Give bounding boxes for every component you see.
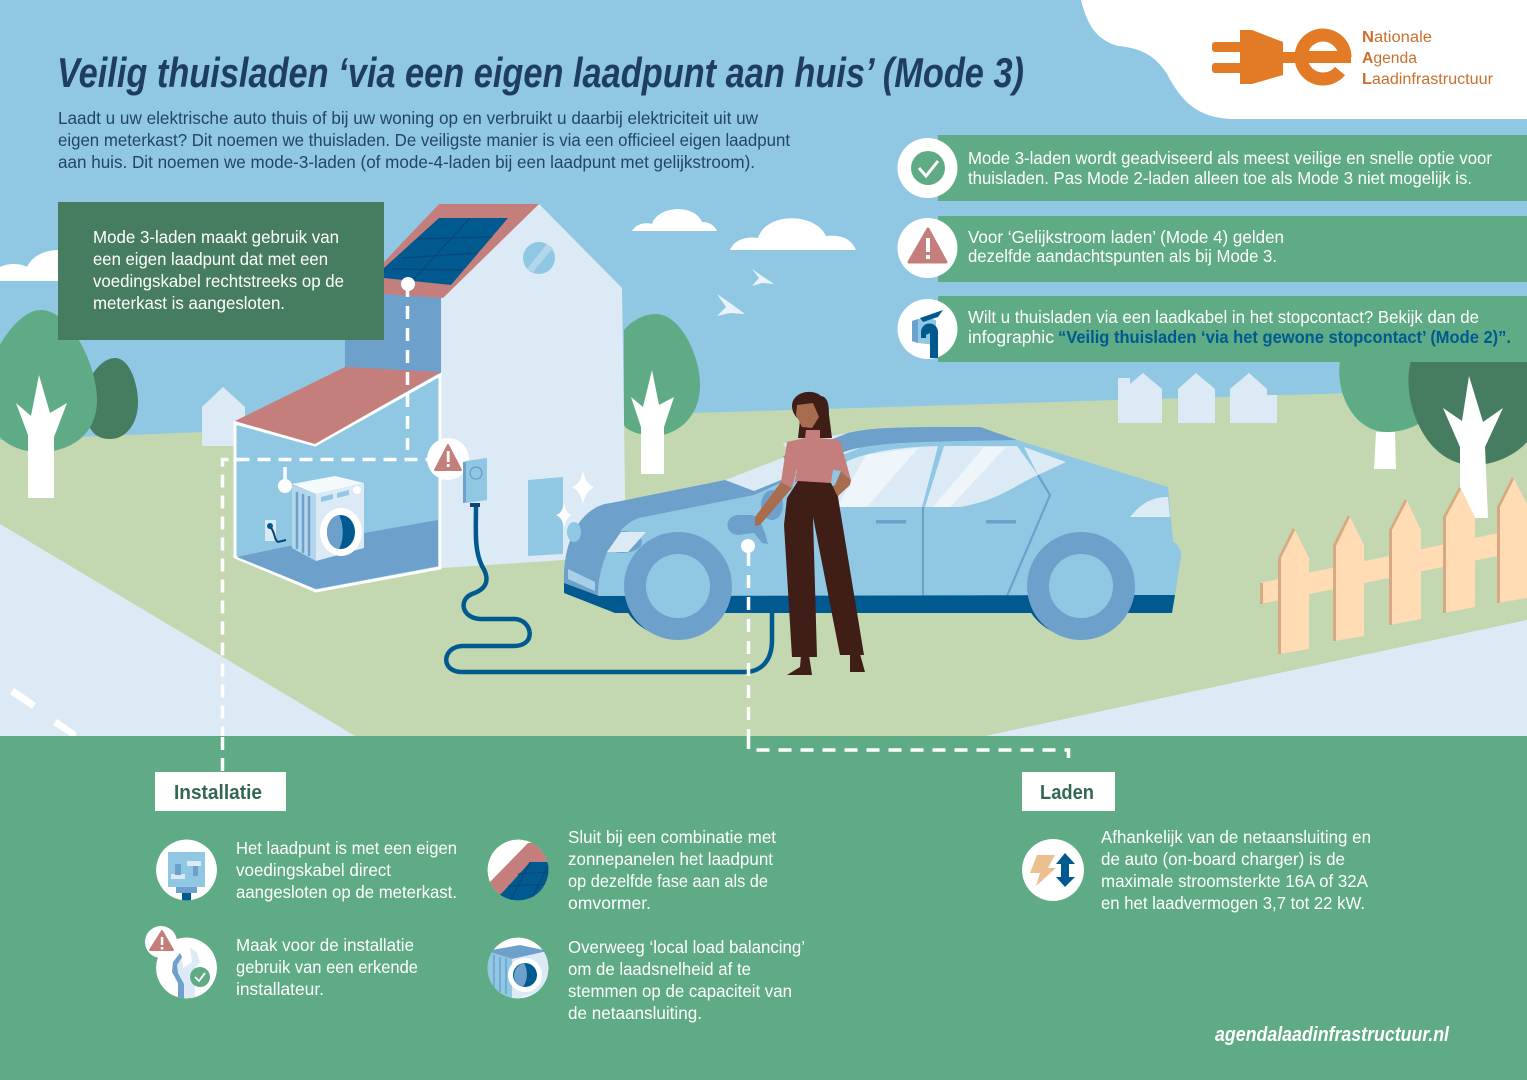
charger box [463,458,487,507]
intro text: aan huis. Dit noemen we mode-3-laden (of mode-4-laden bij een laadpunt met gelijkstroom). [58,152,755,172]
door [528,477,563,556]
callout mode 3 [58,202,384,340]
cloud middle [632,209,717,231]
socket and cable [265,520,286,542]
intro text [58,108,790,172]
logo text: Nationale [1362,29,1432,46]
annexe room [235,375,440,591]
item: laden [1022,827,1371,913]
grass [0,388,1527,736]
tree left dark [85,358,138,439]
front wheel [624,532,732,640]
left arm [755,482,792,526]
item: zonnepanelen: zonnepanelen het laadpunt [568,849,773,869]
item: load balancing [486,937,805,1023]
icon: wrench [145,926,217,998]
callout mode 3: voedingskabel rechtstreeks op de [93,271,344,291]
car body [598,440,1181,596]
item: load balancing: Overweeg ‘local load balancing’ [568,937,805,957]
advice banner 3: Wilt u thuisladen via een laadkabel in het stopcontact? Bekijk dan de [968,307,1479,327]
label: Laden: Laden [1040,782,1094,804]
dashed route solar to warning [401,277,415,450]
charging cable [446,505,772,672]
icon: warning [909,229,946,262]
door lines [923,475,1050,596]
blue side wall [345,292,441,374]
dashed route laden [741,539,1068,758]
label: Laden [1022,772,1115,811]
dashed route installation [222,460,438,772]
windscreen [725,433,872,491]
logo [1212,29,1493,88]
item: load balancing: om de laadsnelheid af te [568,959,751,979]
advice banner 3 [898,296,1527,362]
item: laden: Afhankelijk van de netaansluiting en [1101,827,1371,847]
annexe cutaway [235,367,441,591]
footer green panel [0,736,1527,1080]
pickets [1279,477,1527,654]
dashed routes in footer [222,736,1068,772]
logo plug icon [1212,30,1351,84]
icon: check [911,151,945,185]
headlight [567,522,595,591]
annexe floor [237,520,438,589]
annexe roof [235,367,441,444]
item: zonnepanelen [488,830,776,909]
item: installateur: Maak voor de installatie [236,935,414,955]
label: Installatie [155,772,286,811]
tree right trunk [1374,432,1396,469]
advice banner 2: Voor ‘Gelijkstroom laden’ (Mode 4) gelden [968,227,1284,247]
advice banner 1 [898,135,1527,201]
icon: solar roof [488,840,548,900]
item: laadpunt: Het laadpunt is met een eigen [236,838,457,858]
roof [384,204,539,298]
item: installateur: installateur. [236,979,324,999]
car lower shadow [628,613,1053,632]
tree right green [1339,360,1440,432]
item: zonnepanelen: Sluit bij een combinatie met [568,827,776,847]
tree right dark [1408,360,1527,465]
intro text: eigen meterkast? Dit noemen we thuisladen. De veiligste manier is via een officieel eigen laadpunt [58,130,790,150]
solar panel [384,218,508,285]
rear wheel [1027,532,1135,640]
logo text: Laadinfrastructuur [1362,71,1493,88]
car upper dark shell [564,427,1020,600]
fence rail [1260,527,1527,604]
road right [985,620,1527,736]
logo text: Agenda [1362,50,1417,67]
advice banner 1: Mode 3-laden wordt geadviseerd als meest veilige en snelle optie voor [968,148,1492,168]
tree right white trunk [1443,376,1503,518]
title: Veilig thuisladen ‘via een eigen laadpunt aan huis’ (Mode 3) [57,49,1024,96]
rear side window [1024,447,1066,475]
callout mode 3: Mode 3-laden maakt gebruik van [93,227,339,247]
item: zonnepanelen: op dezelfde fase aan als de [568,871,768,891]
label: Installatie: Installatie [174,782,262,804]
small house left [202,387,245,446]
item: laden: de auto (on-board charger) is de [1101,849,1345,869]
woman [755,392,865,675]
item: load balancing: stemmen op de capaciteit van [568,981,792,1001]
fence [1260,477,1527,654]
website url: agendalaadinfrastructuur.nl [1215,1024,1449,1046]
advice banner 2 [898,216,1527,282]
item: laadpunt: aangesloten op de meterkast. [236,882,457,902]
item: laden: maximale stroomsterkte 16A of 32A [1101,871,1368,891]
front window [836,446,938,507]
item: load balancing: de netaansluiting. [568,1003,702,1023]
face [796,403,819,428]
icon: lightning and arrows [1022,839,1084,901]
item: laadpunt [156,838,457,902]
road left [0,524,355,736]
logo text [1362,29,1493,88]
charge port [728,515,768,544]
birds [717,269,774,316]
trousers [784,481,864,657]
advice banner 1: thuisladen. Pas Mode 2-laden alleen toe als Mode 3 niet mogelijk is. [968,168,1472,188]
road markings [10,688,76,736]
intro text: Laadt u uw elektrische auto thuis of bij uw woning op en verbruikt u daarbij elektriciteit uit uw [58,108,758,128]
windscreen frame [783,427,1017,470]
item: laden: en het laadvermogen 3,7 tot 22 kW. [1101,893,1365,913]
tree left trunk [16,375,67,498]
icon: washing machine [486,938,548,1000]
item: installateur: gebruik van een erkende [236,957,418,977]
sill [564,583,1175,613]
logo background blob [1081,0,1527,119]
front side light [602,531,646,553]
item: installateur [145,926,418,999]
house main [345,204,626,568]
sparkles [556,470,594,528]
icon: socket charger [912,310,943,358]
washing machine [292,476,364,561]
door handles [876,520,1016,524]
round window [523,242,555,274]
rear window [925,446,1038,507]
advice banner 2: dezelfde aandachtspunten als bij Mode 3. [968,246,1277,266]
right arm [824,471,851,497]
warning marker [427,438,469,480]
tail light [1130,497,1170,517]
junction dot [278,467,292,493]
house wall [441,204,626,568]
tree left green [0,310,97,452]
feet [787,654,865,675]
hair [792,392,832,438]
advice banner 3: infographic [968,327,1054,347]
item: zonnepanelen: omvormer. [568,893,651,913]
door shadow near woman [761,490,783,520]
car [564,427,1181,640]
callout mode 3: een eigen laadpunt dat met een [93,249,328,269]
icon: charger [156,840,217,901]
advice banner 3: “Veilig thuisladen ‘via het gewone stopcontact’ (Mode 2)”. [1058,327,1511,347]
small houses right [1118,373,1277,423]
sweater [781,430,851,488]
callout mode 3: meterkast is aangesloten. [93,293,285,313]
cloud right [730,218,856,250]
tree middle green [624,314,700,436]
item: laadpunt: voedingskabel direct [236,860,391,880]
cloud left [0,250,58,281]
tree middle trunk [631,370,674,474]
